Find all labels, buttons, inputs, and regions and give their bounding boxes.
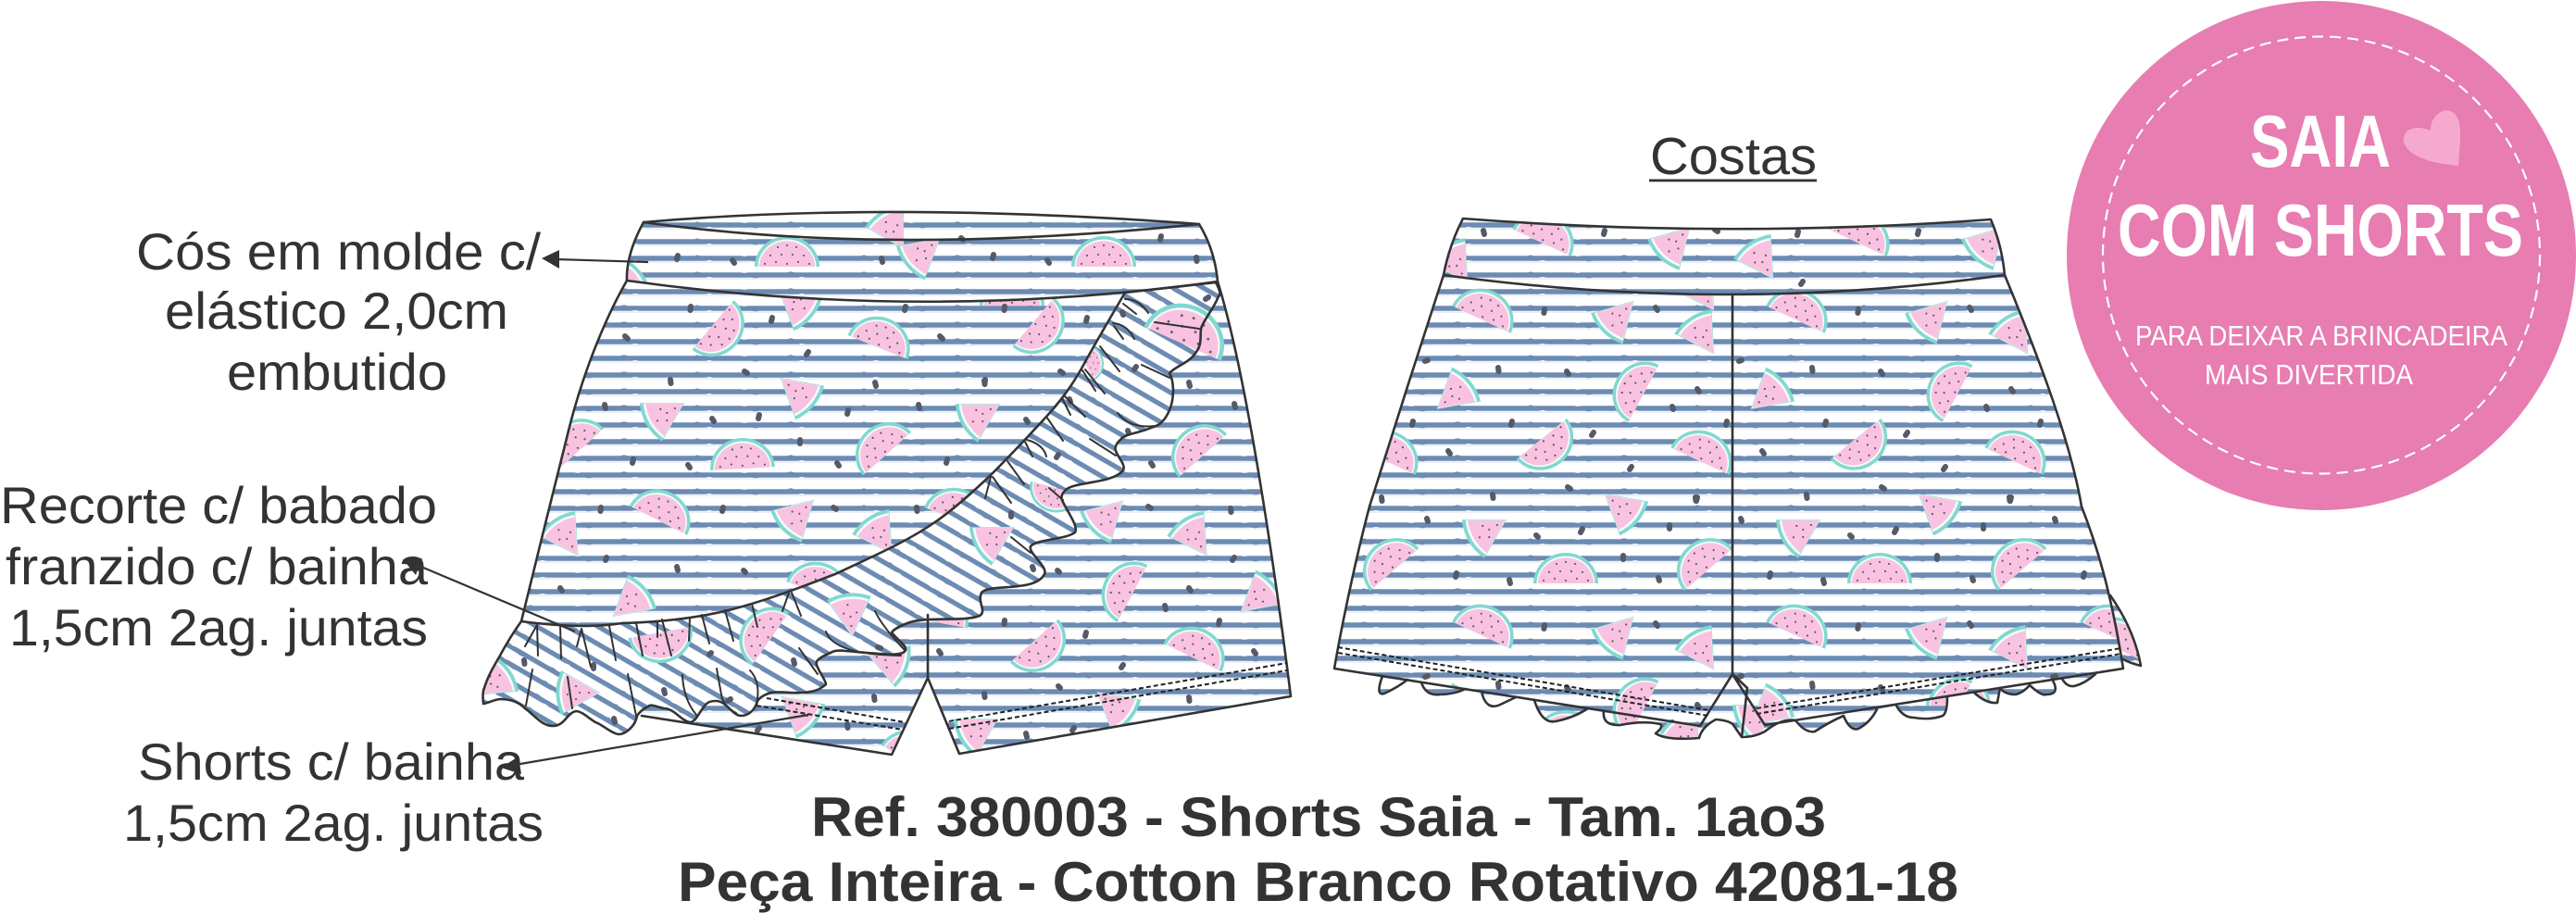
front outline and seams bbox=[483, 212, 1291, 755]
arrow: shorts hem bbox=[501, 715, 808, 774]
back side ruffle bbox=[2113, 606, 2139, 663]
badge: saia com shorts: MAIS DIVERTIDA bbox=[2205, 358, 2413, 391]
back waistband fabric bbox=[1444, 222, 2004, 294]
back ruffle peeking under hem bbox=[1380, 674, 2094, 737]
heading: Costas: Costas bbox=[1650, 127, 1817, 186]
callout: ruffle bbox=[0, 476, 437, 657]
callout: ruffle: franzido c/ bainha bbox=[6, 537, 429, 595]
front hem double stitching bbox=[757, 663, 1287, 730]
callout: ruffle: 1,5cm 2ag. juntas bbox=[9, 598, 428, 657]
arrow: waistband bbox=[542, 250, 648, 269]
callout: waistband: elástico 2,0cm bbox=[165, 281, 508, 340]
front ruffle fabric bbox=[483, 285, 1219, 732]
callout: ruffle: Recorte c/ babado bbox=[0, 476, 437, 534]
callout: shorts hem: 1,5cm 2ag. juntas bbox=[123, 794, 544, 852]
badge: saia com shorts: PARA DEIXAR A BRINCADEIRA bbox=[2135, 319, 2507, 352]
front body fabric bbox=[524, 288, 1289, 752]
badge: saia com shorts bbox=[2067, 1, 2576, 510]
arrow: ruffle bbox=[403, 558, 575, 632]
title: reference and fabric: Peça Inteira - Cotton Branco Rotativo 42081-18 bbox=[678, 851, 1958, 913]
callout: waistband: Cós em molde c/ bbox=[136, 222, 541, 281]
back body fabric bbox=[1337, 276, 2120, 724]
callout: waistband: embutido bbox=[227, 343, 447, 401]
callout: shorts hem: Shorts c/ bainha bbox=[138, 732, 525, 791]
garment: back view of skort bbox=[1324, 201, 2360, 907]
callout: shorts hem bbox=[123, 732, 544, 852]
title: reference and fabric: Ref. 380003 - Shorts Saia - Tam. 1ao3 bbox=[811, 786, 1826, 848]
back hem double stitching bbox=[1338, 647, 2121, 716]
back outline and seams bbox=[1334, 219, 2141, 739]
front waistband fabric bbox=[628, 213, 1217, 300]
garment: front view of skort bbox=[481, 211, 1293, 756]
badge: saia com shorts: SAIA bbox=[2250, 100, 2391, 182]
title: reference and fabric bbox=[678, 786, 1958, 913]
icon: heart bbox=[2404, 110, 2460, 166]
callout: waistband bbox=[136, 222, 541, 401]
